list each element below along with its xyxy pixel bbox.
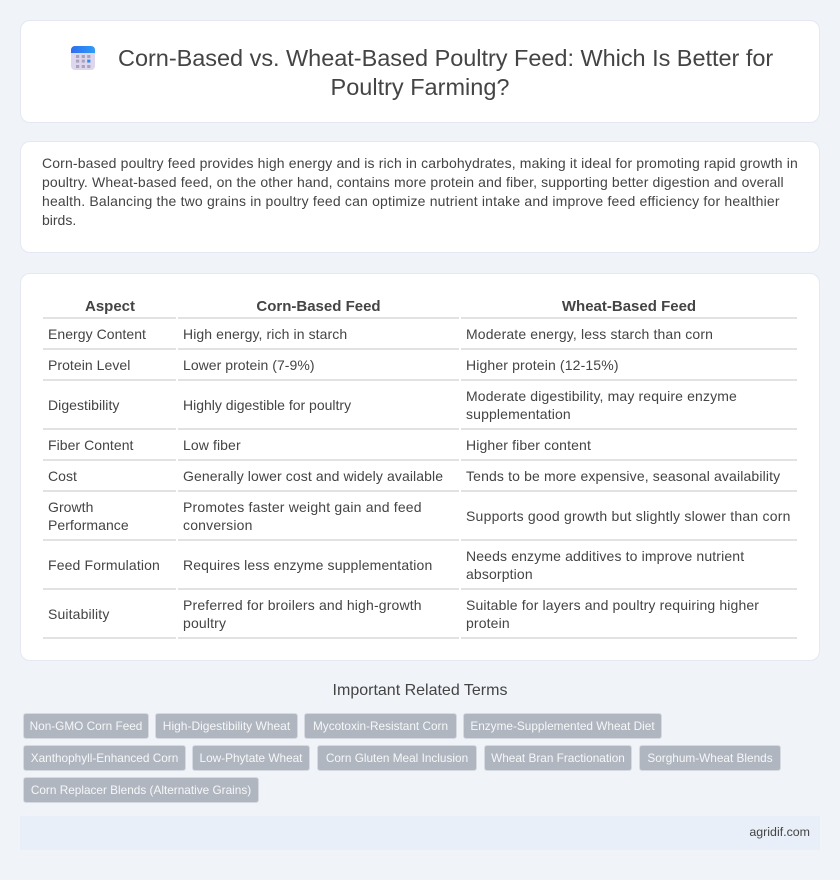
text: conversion	[183, 517, 253, 533]
row: fiber content: Fiber Content	[48, 437, 133, 453]
text: Higher protein (12-15%)	[466, 357, 619, 373]
row: growth performance: Performance	[48, 517, 129, 533]
tags: related terms: Xanthophyll-Enhanced Corn	[31, 751, 178, 765]
text: Higher fiber content	[466, 437, 591, 453]
text: Supports good growth but slightly slower than corn	[466, 508, 791, 524]
row: cost: Cost	[48, 468, 77, 484]
text: Needs enzyme additives to improve nutrient	[466, 548, 744, 564]
tags: related terms: Wheat Bran Fractionation	[491, 751, 625, 765]
text: Moderate energy, less starch than corn	[466, 326, 713, 342]
text: Suitable for layers and poultry requiring higher	[466, 597, 759, 613]
text: Lower protein (7-9%)	[183, 357, 315, 373]
summary text: birds.	[42, 212, 76, 228]
row: protein level: Protein Level	[48, 357, 130, 373]
text: Requires less enzyme supplementation	[183, 557, 432, 573]
text: Promotes faster weight gain and feed	[183, 499, 422, 515]
text: absorption	[466, 566, 533, 582]
tags: related terms: Low-Phytate Wheat	[200, 751, 302, 765]
table heading: Corn-Based Feed: Corn-Based Feed	[256, 298, 381, 315]
row: growth performance: Growth	[48, 499, 93, 515]
summary text: Corn-based poultry feed provides high energy and is rich in carbohydrates, making it ideal for promoting rapid growth in	[42, 155, 798, 171]
heading: related terms: Important Related Terms	[333, 682, 507, 699]
text: Generally lower cost and widely available	[183, 468, 443, 484]
title: Poultry Farming?	[331, 74, 509, 100]
tags: related terms: Corn Gluten Meal Inclusion	[326, 751, 468, 765]
tags: related terms: Sorghum-Wheat Blends	[647, 751, 773, 765]
row: suitability: Suitability	[48, 606, 109, 622]
summary text: health. Balancing the two grains in poultry feed can optimize nutrient intake and improve feed efficiency for healthier	[42, 193, 780, 209]
title: Corn-Based vs. Wheat-Based Poultry Feed: Which Is Better for	[118, 45, 773, 71]
tags: related terms: Enzyme-Supplemented Wheat Diet	[470, 719, 655, 733]
text: Low fiber	[183, 437, 241, 453]
text: Preferred for broilers and high-growth	[183, 597, 422, 613]
text: Moderate digestibility, may require enzyme	[466, 388, 737, 404]
row: energy content: Energy Content	[48, 326, 146, 342]
text: Highly digestible for poultry	[183, 397, 351, 413]
tags: related terms: Mycotoxin-Resistant Corn	[313, 719, 448, 733]
text: poultry	[183, 615, 226, 631]
tags: related terms: Non-GMO Corn Feed	[30, 719, 142, 733]
title	[118, 45, 773, 100]
tags: related terms: High-Digestibility Wheat	[163, 719, 290, 733]
summary text	[42, 155, 798, 228]
panel: title header	[20, 20, 820, 123]
tags: related terms	[23, 713, 781, 803]
text: Tends to be more expensive, seasonal availability	[466, 468, 780, 484]
row: growth performance	[48, 499, 129, 533]
footer credit: agridif.com	[749, 825, 810, 839]
row: feed formulation: Feed Formulation	[48, 557, 160, 573]
table	[44, 296, 798, 639]
row: digestibility: Digestibility	[48, 397, 119, 413]
table heading: Aspect: Aspect	[85, 298, 135, 315]
panel: summary	[20, 141, 820, 253]
text: protein	[466, 615, 510, 631]
table heading: Wheat-Based Feed: Wheat-Based Feed	[562, 298, 696, 315]
tags: related terms: Corn Replacer Blends (Alternative Grains)	[31, 783, 251, 797]
text: supplementation	[466, 406, 571, 422]
summary text: poultry. Wheat-based feed, on the other hand, contains more protein and fiber, supporting better digestion and overall	[42, 174, 784, 190]
icon: calendar	[71, 46, 95, 70]
text: High energy, rich in starch	[183, 326, 347, 342]
panel: comparison table	[20, 273, 820, 661]
footer	[20, 816, 820, 850]
